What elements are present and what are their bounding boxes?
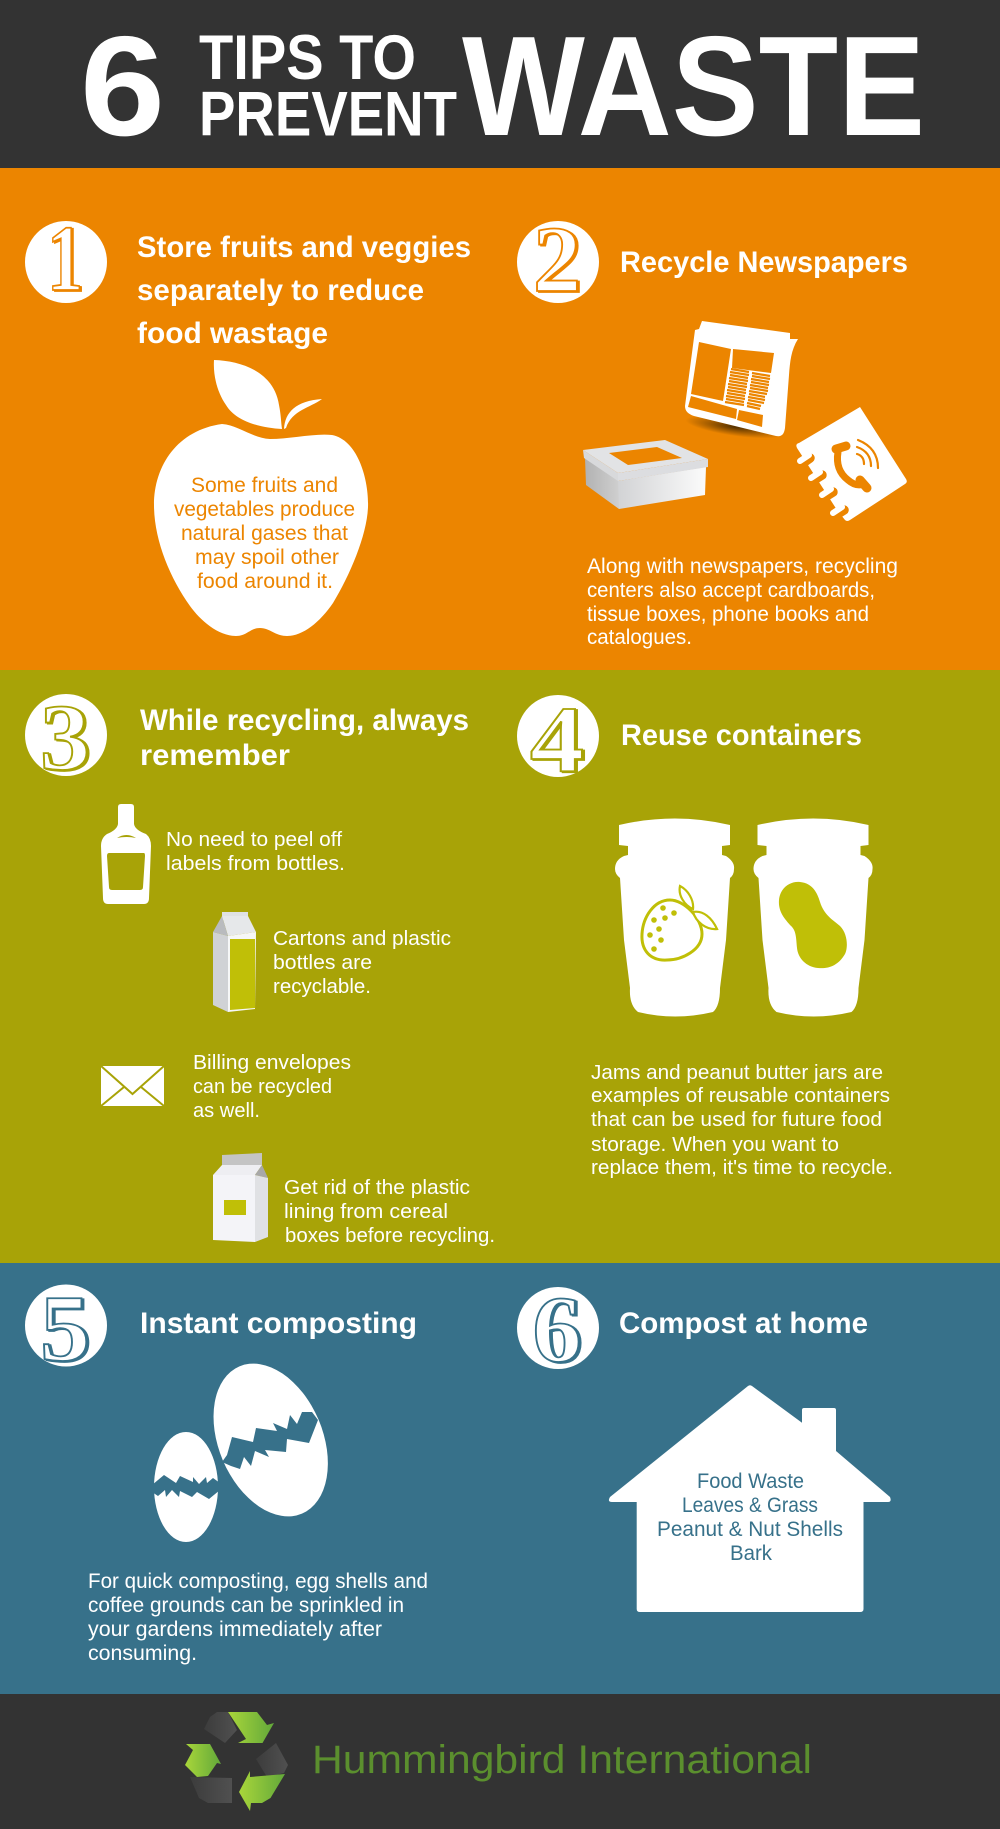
text: tip 2 body: centers also accept cardboards, <box>587 579 875 602</box>
text: tip 2 body: Along with newspapers, recycling <box>587 555 898 578</box>
text: tip 2 body: tissue boxes, phone books and <box>587 603 869 626</box>
badge: number 3: 3 <box>40 686 90 790</box>
badge: number 5: 5 <box>40 1277 90 1381</box>
house caption: Peanut & Nut Shells <box>657 1518 843 1541</box>
heading: tip 3: remember <box>140 739 290 772</box>
text: carton tip: bottles are <box>273 951 372 974</box>
icon: cereal box <box>213 1153 268 1242</box>
header banner <box>0 0 1000 168</box>
badge: number 6 <box>517 1278 599 1382</box>
icon: phone book <box>796 407 907 521</box>
icon: recycling logo <box>185 1712 288 1811</box>
heading: tip 1: food wastage <box>137 317 328 350</box>
text: tip 4 body: that can be used for future food <box>591 1108 882 1131</box>
text: cereal box tip: boxes before recycling. <box>285 1224 495 1247</box>
footer banner <box>0 1694 1000 1829</box>
text: tip 5 body: consuming. <box>88 1642 197 1665</box>
heading: tip 4: Reuse containers <box>621 719 862 752</box>
text: tip 5 body: your gardens immediately after <box>88 1618 382 1641</box>
badge: number 2: 2 <box>533 208 581 312</box>
badge: number 5 <box>25 1277 107 1381</box>
text: envelope tip: Billing envelopes <box>193 1051 351 1074</box>
text: bottle tip: No need to peel off <box>166 828 342 851</box>
text: tip 4 body: storage. When you want to <box>591 1133 839 1156</box>
heading: tip 1: Store fruits and veggies <box>137 231 471 264</box>
house caption: Food Waste <box>697 1470 804 1493</box>
text: tip 4 body: Jams and peanut butter jars are <box>591 1061 883 1084</box>
badge: number 4 <box>517 688 599 792</box>
text: tip 4 body: examples of reusable containers <box>591 1084 890 1107</box>
panel: blue band, tips 5 and 6 <box>0 1263 1000 1694</box>
heading: tip 5: Instant composting <box>140 1307 417 1340</box>
icon: tissue box <box>583 440 708 509</box>
apple caption: may spoil other <box>195 546 339 569</box>
title: 6: 6 <box>80 7 165 166</box>
text: bottle tip: labels from bottles. <box>166 852 345 875</box>
text: envelope tip: as well. <box>193 1099 260 1122</box>
badge: number 1: 1 <box>47 207 83 311</box>
heading: tip 1: separately to reduce <box>137 274 424 307</box>
heading: tip 3: While recycling, always <box>140 704 469 737</box>
icon: newspaper <box>684 321 798 443</box>
badge: number 4: 4 <box>530 688 584 792</box>
icon: peanut butter jar <box>754 818 873 1016</box>
panel: olive band, tips 3 and 4 <box>0 670 1000 1263</box>
title: tips to: TIPS TO <box>199 23 416 93</box>
badge: number 1 <box>25 207 107 311</box>
title: waste: WASTE <box>462 7 925 166</box>
text: carton tip: recyclable. <box>273 975 371 998</box>
title: prevent: PREVENT <box>199 80 457 150</box>
icon: strawberry jam jar <box>615 818 734 1016</box>
heading: tip 6: Compost at home <box>619 1307 868 1340</box>
icon: envelope <box>101 1066 164 1106</box>
apple caption: vegetables produce <box>174 498 355 521</box>
house caption: Bark <box>730 1542 772 1565</box>
text: tip 2 body: catalogues. <box>587 626 692 649</box>
text: cereal box tip: Get rid of the plastic <box>284 1176 470 1199</box>
icon: apple with text <box>154 360 368 636</box>
badge: number 3 <box>25 686 107 790</box>
apple caption: food around it. <box>197 570 333 593</box>
apple caption: Some fruits and <box>191 474 338 497</box>
heading: tip 2: Recycle Newspapers <box>620 246 908 279</box>
icon: cracked eggs <box>152 1346 350 1542</box>
text: tip 5 body: For quick composting, egg shells and <box>88 1570 428 1593</box>
text: carton tip: Cartons and plastic <box>273 927 451 950</box>
apple caption: natural gases that <box>181 522 348 545</box>
text: tip 5 body: coffee grounds can be sprinkled in <box>88 1594 404 1617</box>
text: cereal box tip: lining from cereal <box>284 1200 448 1223</box>
icon: house with text <box>609 1385 891 1612</box>
badge: number 2 <box>517 208 599 312</box>
badge: number 6: 6 <box>532 1278 582 1382</box>
icon: bottle <box>101 804 151 904</box>
icon: carton <box>213 912 256 1012</box>
house caption: Leaves & Grass <box>682 1494 818 1517</box>
text: envelope tip: can be recycled <box>193 1075 332 1098</box>
panel: orange band, tips 1 and 2 <box>0 168 1000 670</box>
text: company name: Hummingbird International <box>312 1738 812 1782</box>
text: tip 4 body: replace them, it's time to recycle. <box>591 1156 893 1179</box>
